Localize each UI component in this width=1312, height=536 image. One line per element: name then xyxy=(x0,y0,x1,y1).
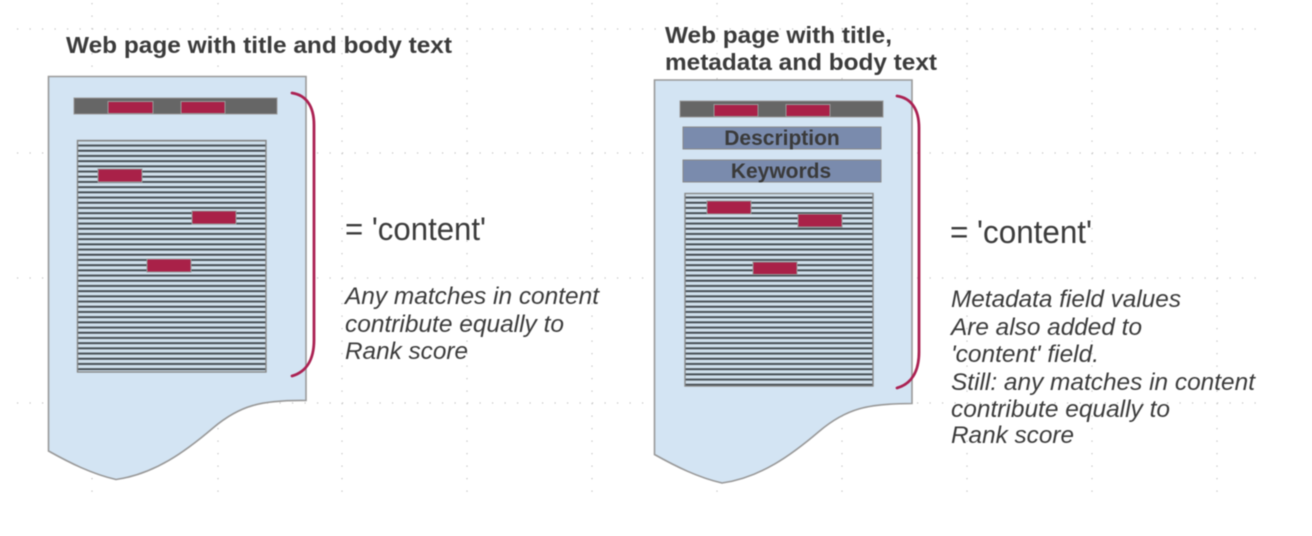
note: left: Any matches in content xyxy=(343,283,600,310)
heading: right diagram: metadata and body text xyxy=(665,49,937,75)
heading: right diagram: Web page with title, xyxy=(665,22,892,48)
panel: web page with title and body text xyxy=(48,32,606,480)
page shape: right xyxy=(654,80,912,483)
body text block: right xyxy=(685,194,873,386)
label: content right: = 'content' xyxy=(950,214,1092,250)
metadata field: description: Description xyxy=(724,127,840,150)
note: right: Are also added to xyxy=(949,314,1142,341)
body text block: left xyxy=(78,140,266,372)
metadata field: keywords xyxy=(683,160,881,183)
label: content left: = 'content' xyxy=(345,211,486,247)
page shape: left xyxy=(48,76,306,480)
heading: left diagram: Web page with title and body text xyxy=(66,32,452,58)
title bar: left xyxy=(74,98,277,114)
bracket: right xyxy=(897,96,919,388)
panel: web page with title, metadata and body text xyxy=(654,22,1262,483)
note: right: Metadata field values xyxy=(951,286,1181,313)
metadata field: description xyxy=(683,127,881,150)
note: right: 'content' field. xyxy=(951,341,1099,368)
metadata field: keywords: Keywords xyxy=(731,160,831,183)
title bar: right xyxy=(680,101,883,117)
note: right: Still: any matches in content xyxy=(951,369,1256,396)
note: left: Rank score xyxy=(345,338,468,365)
bracket: left xyxy=(292,93,314,376)
note: left: contribute equally to xyxy=(345,311,564,338)
note: right: Rank score xyxy=(951,422,1074,449)
note: right: contribute equally to xyxy=(951,396,1170,423)
